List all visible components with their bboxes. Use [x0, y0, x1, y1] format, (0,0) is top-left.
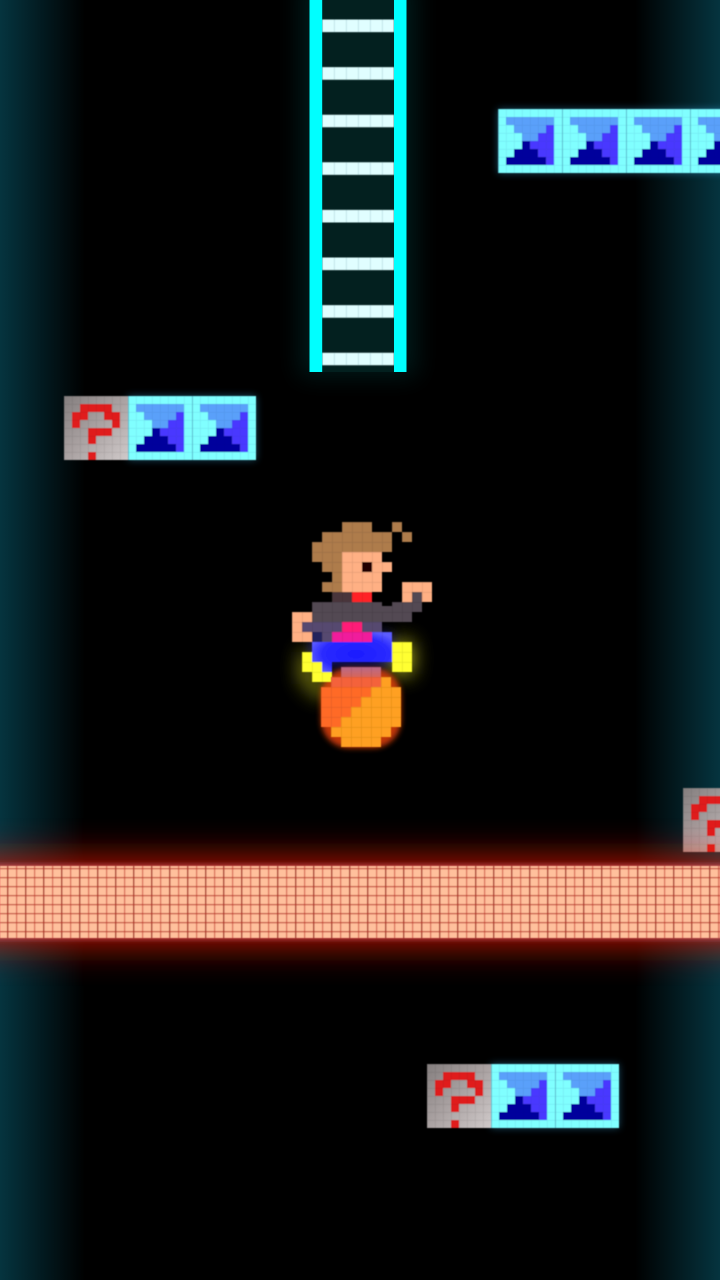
- blue shorts: [312, 632, 392, 672]
- block row: bottom with question block: [427, 1064, 619, 1128]
- ladder rungs: [322, 20, 394, 365]
- eye: [362, 562, 372, 572]
- character glow: [302, 634, 412, 748]
- shirt: [302, 592, 422, 642]
- block row: left with question block: [64, 396, 256, 460]
- left wall glow: [0, 0, 85, 1280]
- sprite grid: [292, 522, 432, 682]
- orange ball: [321, 667, 401, 747]
- question block: right edge: [683, 788, 720, 852]
- character on ball: [292, 522, 432, 748]
- chest pink: [342, 622, 362, 632]
- neck scarf: [352, 592, 372, 602]
- hair: [312, 522, 412, 592]
- yellow feet: [302, 642, 412, 682]
- ladder rails: [310, 0, 406, 372]
- skin: [292, 552, 432, 642]
- block row: top right: [498, 109, 720, 173]
- ladder: [300, 0, 416, 376]
- glowing floor: [0, 862, 720, 942]
- body sprite: [292, 522, 432, 682]
- right wall glow: [635, 0, 720, 1280]
